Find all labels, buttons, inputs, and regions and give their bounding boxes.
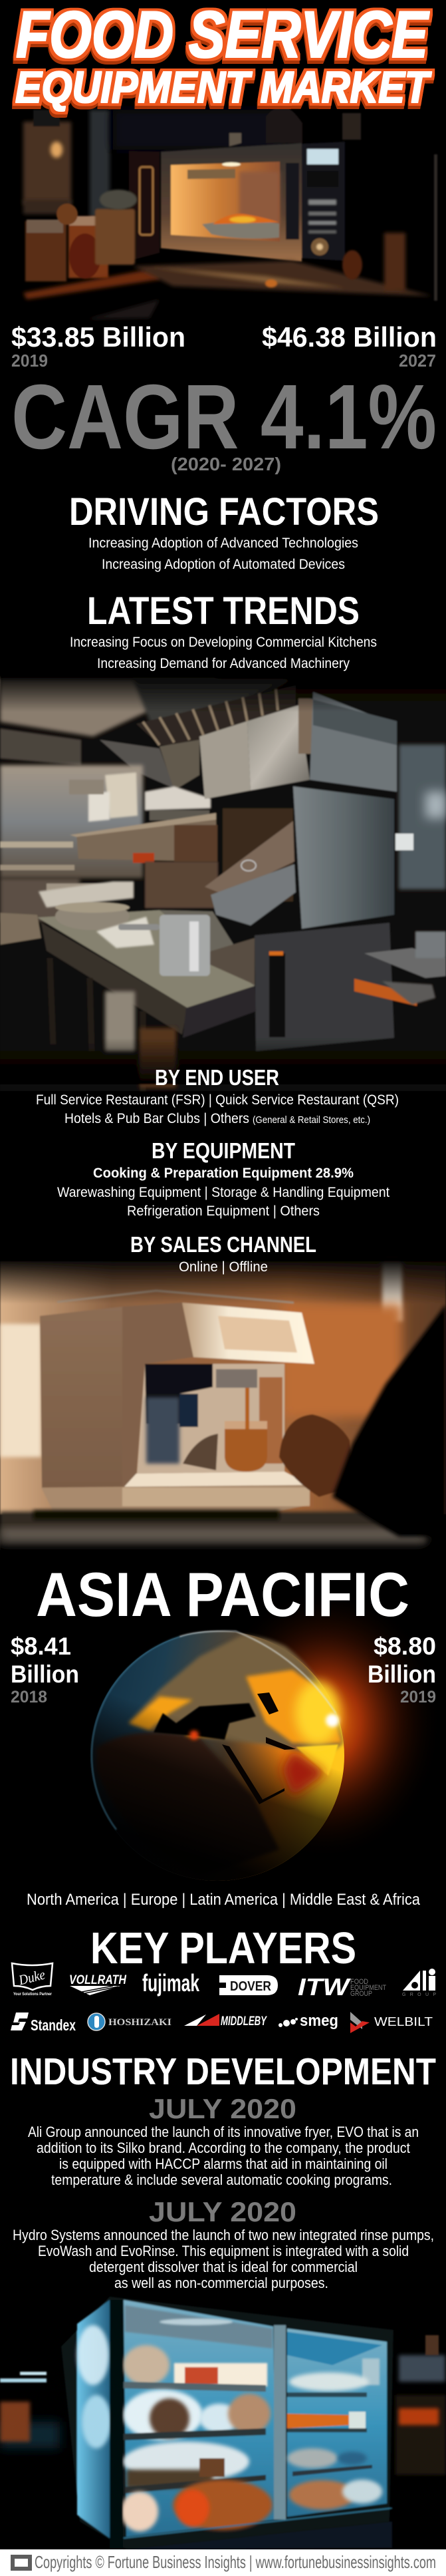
other regions: North America | Europe | Latin America | Middle East & Africa (27, 1891, 421, 1909)
india (296, 1744, 338, 1776)
development: Ali Group: addition to its Silko brand. According to the company, the product (37, 2140, 410, 2156)
upper stainless box (199, 721, 251, 799)
machine mid body (122, 1303, 193, 1489)
market values: 2019 (11, 351, 48, 371)
logo: smeg (279, 2012, 338, 2030)
asia pacific value 2018: 2018 (11, 1688, 47, 1706)
market values: 2027 (399, 351, 436, 371)
footer logo (11, 2555, 32, 2571)
main door glass (124, 2300, 276, 2537)
logo: ITW food equipment group: FOOD (350, 1978, 368, 1986)
food bowl (202, 221, 279, 239)
africa land (96, 1732, 279, 1877)
logo: Welbilt (350, 2012, 433, 2033)
logo: ITW food equipment group (298, 1973, 386, 2001)
logo: Dover: DOVER (230, 1979, 271, 1994)
shelf food 3 (123, 2442, 249, 2482)
cabinet (61, 2297, 393, 2549)
logo: Hoshizaki: HOSHIZAKI (108, 2017, 171, 2028)
fryer (223, 808, 293, 901)
coffee cup (225, 1421, 267, 1472)
segmentation: by equipment: Refrigeration Equipment | Others (127, 1204, 320, 1219)
logo: Ali Group (402, 1969, 436, 1997)
development: Ali Group: JULY 2020 (149, 2093, 296, 2124)
asia pacific value 2018 (11, 1633, 79, 1706)
by sales channel: Online | Offline (179, 1259, 268, 1275)
latest trends: LATEST TRENDS (87, 589, 360, 633)
machine top head (182, 1303, 314, 1364)
microwave open door (129, 151, 160, 261)
development: Hydro Systems: JULY 2020 (149, 2196, 296, 2227)
segmentation: by end user (36, 1065, 399, 1126)
pitcher (160, 915, 210, 976)
asia pacific value 2019 (368, 1633, 436, 1706)
logo: ITW food equipment group: EQUIPMENT (350, 1984, 386, 1992)
footer (0, 2549, 446, 2576)
latest trends: Increasing Demand for Advanced Machinery (97, 656, 350, 671)
development: Ali Group: is equipped with HACCP alarms that aid in maintaining oil (59, 2156, 388, 2172)
sink (364, 948, 446, 978)
logo: Welbilt: WELBILT (374, 2015, 433, 2028)
image: microwave in dark kitchen (23, 106, 437, 319)
logo: ITW food equipment group: GROUP (350, 1990, 372, 1998)
base unit (255, 923, 394, 1051)
segmentation: by equipment: BY EQUIPMENT (152, 1138, 295, 1163)
hand and arm (279, 1414, 352, 1497)
development: Hydro Systems: as well as non-commercial purposes. (114, 2275, 328, 2291)
segmentation: by equipment (57, 1138, 390, 1219)
region heading: ASIA PACIFIC (36, 1559, 409, 1629)
wall (0, 765, 143, 878)
segmentation: by equipment: Cooking & Preparation Equipment 28.9% (93, 1166, 354, 1181)
logo: Standex (11, 2012, 76, 2034)
logo: Hoshizaki (88, 2013, 171, 2030)
development: Hydro Systems: detergent dissolver that is ideal for commercial (89, 2259, 358, 2275)
latest trends (70, 589, 377, 671)
driving factors: Increasing Adoption of Automated Devices (102, 557, 345, 572)
prep table (0, 913, 41, 945)
hot land (246, 1670, 342, 1743)
key players heading: KEY PLAYERS (90, 1923, 356, 1973)
machine base (122, 1472, 310, 1489)
market values (11, 321, 437, 371)
by sales channel (130, 1232, 316, 1275)
market values: $46.38 Billion (262, 321, 437, 353)
driving factors (69, 490, 379, 572)
logo: Middleby (184, 2014, 268, 2028)
door divider (274, 2325, 286, 2519)
shelf food 1 (123, 2345, 169, 2385)
title (15, 0, 431, 112)
right door glass (287, 2329, 387, 2517)
shelf food 2 (123, 2390, 203, 2440)
recess (137, 1364, 284, 1474)
logo: Ali Group: GROUP (402, 1993, 436, 1997)
segmentation: by equipment: Warewashing Equipment | Storage & Handling Equipment (57, 1185, 390, 1200)
fry basket (205, 821, 294, 895)
image: commercial kitchen (0, 672, 446, 1091)
counter (23, 267, 160, 299)
driving factors: DRIVING FACTORS (69, 490, 379, 534)
machine left body (40, 1307, 122, 1489)
tub and bowl (39, 882, 134, 907)
shelf food 4 (173, 2480, 273, 2530)
asia pacific value 2019: Billion (368, 1661, 436, 1688)
latest trends: Increasing Focus on Developing Commercial Kitchens (70, 635, 377, 650)
asia pacific value 2018: Billion (11, 1661, 79, 1688)
machine rail (57, 1291, 294, 1303)
seas (154, 1703, 256, 1740)
microwave window (171, 162, 280, 242)
driving factors: Increasing Adoption of Advanced Technologies (88, 536, 358, 551)
right side objects (384, 233, 405, 291)
logo: Middleby: MIDDLEBY (221, 2014, 268, 2028)
logo: Duke: Your Solutions Partner (13, 1993, 53, 1997)
asia pacific value 2018: $8.41 (11, 1633, 71, 1660)
globe (90, 1587, 442, 1881)
logo: Duke (12, 1963, 53, 1997)
logo: Duke: Duke (17, 1967, 47, 1989)
microwave front (161, 143, 302, 261)
image: refrigerated display case (0, 2297, 446, 2549)
image: coffee machine (0, 1257, 446, 1563)
segmentation: by end user: Hotels & Pub Bar Clubs | Others (64, 1111, 249, 1126)
control panel (302, 142, 345, 261)
market values: $33.85 Billion (11, 321, 185, 353)
development: Ali Group (28, 2093, 419, 2188)
northern land (128, 1635, 343, 1756)
logo: Dover (219, 1975, 278, 1995)
logo: Vollrath: VOLLRATH (69, 1973, 127, 1987)
side glass (77, 2300, 112, 2540)
counter (0, 1512, 425, 1545)
plates (105, 772, 138, 818)
fades (0, 1257, 446, 1304)
control shelf (76, 818, 217, 862)
by sales channel: BY SALES CHANNEL (130, 1232, 316, 1257)
development: Hydro Systems (13, 2196, 434, 2291)
fades (0, 672, 446, 712)
segmentation: by end user: (General & Retail Stores, etc.) (253, 1114, 370, 1126)
logo: Standex: Standex (31, 2016, 76, 2034)
CAGR: (2020- 2027) (171, 454, 281, 474)
segmentation: by end user: Full Service Restaurant (FSR) | Quick Service Restaurant (QSR) (36, 1092, 399, 1108)
asia pacific value 2019: $8.80 (374, 1633, 436, 1660)
logo: Vollrath (69, 1973, 127, 1995)
asia pacific value 2019: 2019 (400, 1688, 436, 1706)
logo: fujimak: fujimak (142, 1969, 200, 1997)
development: Ali Group: temperature & include several automatic cooking programs. (51, 2172, 392, 2188)
logo: ITW food equipment group: ITW (298, 1973, 352, 2001)
logo: smeg: smeg (300, 2012, 338, 2030)
jars and pot (25, 221, 66, 281)
segmentation: by end user: BY END USER (155, 1065, 279, 1090)
